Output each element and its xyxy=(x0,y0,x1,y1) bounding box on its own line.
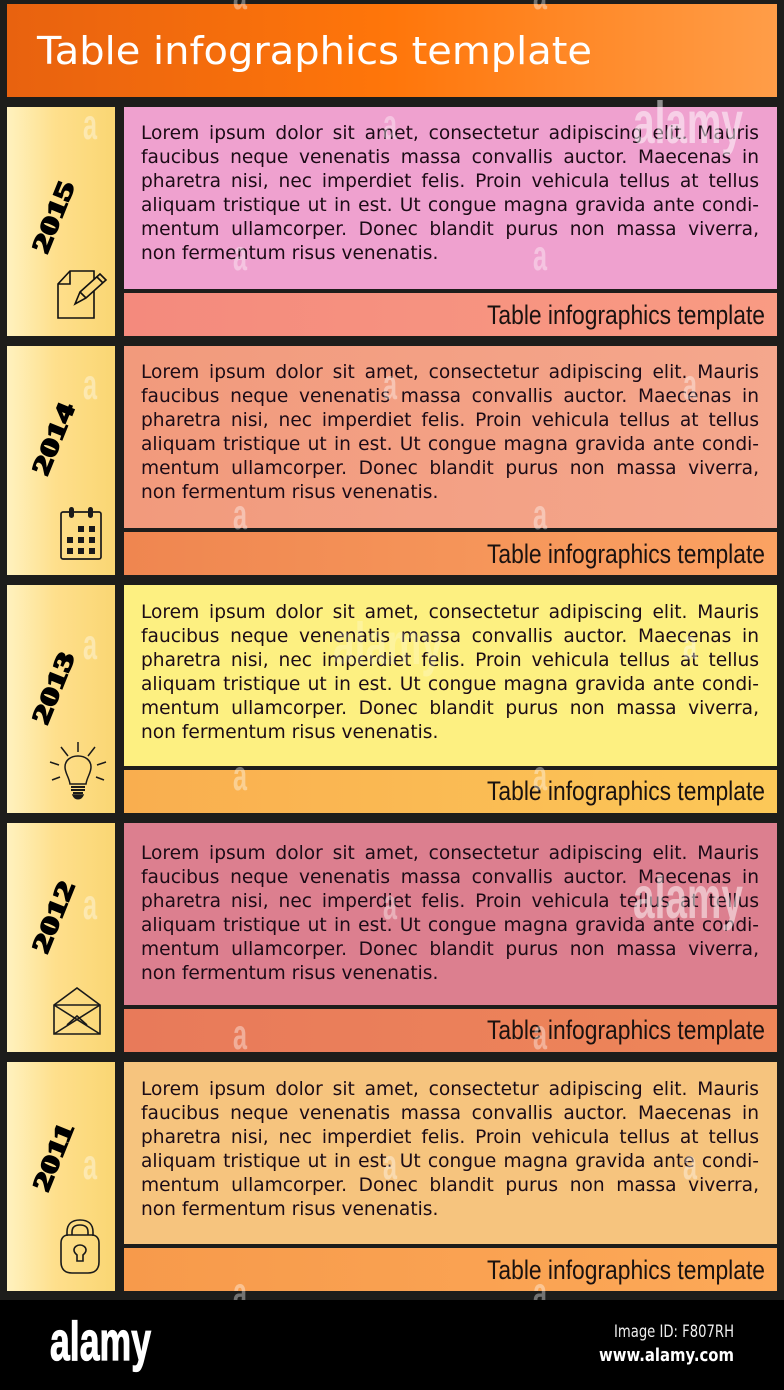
paragraph: Lorem ipsum dolor sit amet, consectetur adipiscing elit. Mauris xyxy=(141,843,759,864)
paragraph: aliquam tristique ut in est. Ut congue magna gravida ante condi- xyxy=(141,915,759,936)
year label 2015: 2015 xyxy=(27,177,81,257)
watermark overlay: a xyxy=(83,621,98,669)
paragraph: non fermentum risus venenatis. xyxy=(141,482,438,503)
text panel 2011 xyxy=(124,1062,777,1244)
paragraph: aliquam tristique ut in est. Ut congue magna gravida ante condi- xyxy=(141,195,759,216)
icon: padlock xyxy=(60,1219,100,1274)
paragraph: Lorem ipsum dolor sit amet, consectetur adipiscing elit. Mauris xyxy=(141,123,759,144)
icon: envelope xyxy=(53,987,101,1035)
watermark overlay: a xyxy=(533,232,548,280)
paragraph: faucibus neque venenatis massa convallis auctor. Maecenas in xyxy=(141,867,759,888)
paragraph xyxy=(141,1079,759,1220)
caption strip 2013 xyxy=(124,770,777,813)
paragraph: mentum ullamcorper. Donec blandit purus non massa viverra, xyxy=(141,1175,759,1196)
watermark overlay: a xyxy=(683,1141,698,1189)
watermark overlay: a xyxy=(533,491,548,539)
text panel 2015 xyxy=(124,107,777,289)
paragraph: pharetra nisi, nec imperdiet felis. Proin vehicula tellus at tellus xyxy=(141,171,759,192)
watermark overlay: a xyxy=(83,881,98,929)
paragraph xyxy=(141,602,759,743)
year label 2014: 2014 xyxy=(27,399,81,479)
alamy logo: alamy xyxy=(50,1310,151,1372)
paragraph: pharetra nisi, nec imperdiet felis. Proin vehicula tellus at tellus xyxy=(141,650,759,671)
text panel 2012 xyxy=(124,823,777,1005)
paragraph: mentum ullamcorper. Donec blandit purus non massa viverra, xyxy=(141,458,759,479)
paragraph: Lorem ipsum dolor sit amet, consectetur adipiscing elit. Mauris xyxy=(141,602,759,623)
watermark overlay: a xyxy=(233,491,248,539)
watermark overlay: a xyxy=(383,881,398,929)
year panel 2011 xyxy=(7,1062,115,1291)
paragraph xyxy=(141,362,759,503)
website: www.alamy.com xyxy=(599,1345,734,1366)
year panel 2012 xyxy=(7,823,115,1052)
paragraph: faucibus neque venenatis massa convallis auctor. Maecenas in xyxy=(141,386,759,407)
image id: Image ID: F807RH xyxy=(614,1322,734,1342)
watermark overlay: a xyxy=(83,361,98,409)
row: 2011 xyxy=(7,1062,777,1291)
paragraph: non fermentum risus venenatis. xyxy=(141,722,438,743)
title: Table infographics template xyxy=(36,29,592,73)
paragraph: pharetra nisi, nec imperdiet felis. Proin vehicula tellus at tellus xyxy=(141,410,759,431)
watermark overlay: a xyxy=(683,621,698,669)
year panel 2014 xyxy=(7,346,115,575)
icon: note and pencil xyxy=(57,270,108,319)
watermark overlay: a xyxy=(383,101,398,149)
paragraph: faucibus neque venenatis massa convallis auctor. Maecenas in xyxy=(141,147,759,168)
paragraph: faucibus neque venenatis massa convallis auctor. Maecenas in xyxy=(141,626,759,647)
watermark overlay: a xyxy=(533,1269,548,1317)
watermark overlay: a xyxy=(233,1011,248,1059)
caption strip 2012 xyxy=(124,1009,777,1052)
caption strip 2015 xyxy=(124,293,777,336)
caption strip 2014 xyxy=(124,532,777,575)
year label 2012: 2012 xyxy=(27,877,81,957)
year label 2013: 2013 xyxy=(27,648,81,728)
paragraph xyxy=(141,123,759,264)
paragraph: pharetra nisi, nec imperdiet felis. Proin vehicula tellus at tellus xyxy=(141,891,759,912)
caption strip 2011 xyxy=(124,1248,777,1291)
paragraph: aliquam tristique ut in est. Ut congue magna gravida ante condi- xyxy=(141,1151,759,1172)
paragraph: mentum ullamcorper. Donec blandit purus non massa viverra, xyxy=(141,939,759,960)
watermark overlay: a xyxy=(383,361,398,409)
watermark overlay: a xyxy=(233,232,248,280)
paragraph: Lorem ipsum dolor sit amet, consectetur adipiscing elit. Mauris xyxy=(141,1079,759,1100)
paragraph: non fermentum risus venenatis. xyxy=(141,1199,438,1220)
row: 2013 xyxy=(7,585,777,813)
paragraph: aliquam tristique ut in est. Ut congue magna gravida ante condi- xyxy=(141,434,759,455)
watermark overlay: a xyxy=(83,1141,98,1189)
row: 2014 xyxy=(7,346,777,575)
watermark overlay: a xyxy=(533,1011,548,1059)
footer bar xyxy=(0,1300,784,1390)
paragraph: faucibus neque venenatis massa convallis auctor. Maecenas in xyxy=(141,1103,759,1124)
watermark overlay: alamy xyxy=(333,611,443,677)
row: 2012 xyxy=(7,823,777,1052)
paragraph: mentum ullamcorper. Donec blandit purus non massa viverra, xyxy=(141,698,759,719)
watermark overlay: a xyxy=(383,1141,398,1189)
watermark overlay: a xyxy=(83,101,98,149)
text panel 2013 xyxy=(124,585,777,766)
text panel 2014 xyxy=(124,346,777,528)
watermark overlay: a xyxy=(683,361,698,409)
row: 2015 xyxy=(7,107,777,336)
icon: calendar xyxy=(60,507,102,560)
year panel 2015 xyxy=(7,107,115,336)
header banner xyxy=(7,4,777,97)
paragraph: pharetra nisi, nec imperdiet felis. Proin vehicula tellus at tellus xyxy=(141,1127,759,1148)
paragraph: Lorem ipsum dolor sit amet, consectetur adipiscing elit. Mauris xyxy=(141,362,759,383)
icon: light bulb xyxy=(50,742,106,800)
watermark overlay: a xyxy=(533,752,548,800)
paragraph xyxy=(141,843,759,984)
watermark overlay: a xyxy=(233,1269,248,1317)
paragraph: mentum ullamcorper. Donec blandit purus non massa viverra, xyxy=(141,219,759,240)
year label 2011: 2011 xyxy=(28,1119,80,1195)
paragraph: non fermentum risus venenatis. xyxy=(141,963,438,984)
year panel 2013 xyxy=(7,585,115,813)
paragraph: non fermentum risus venenatis. xyxy=(141,243,438,264)
watermark overlay: a xyxy=(233,752,248,800)
paragraph: aliquam tristique ut in est. Ut congue magna gravida ante condi- xyxy=(141,674,759,695)
